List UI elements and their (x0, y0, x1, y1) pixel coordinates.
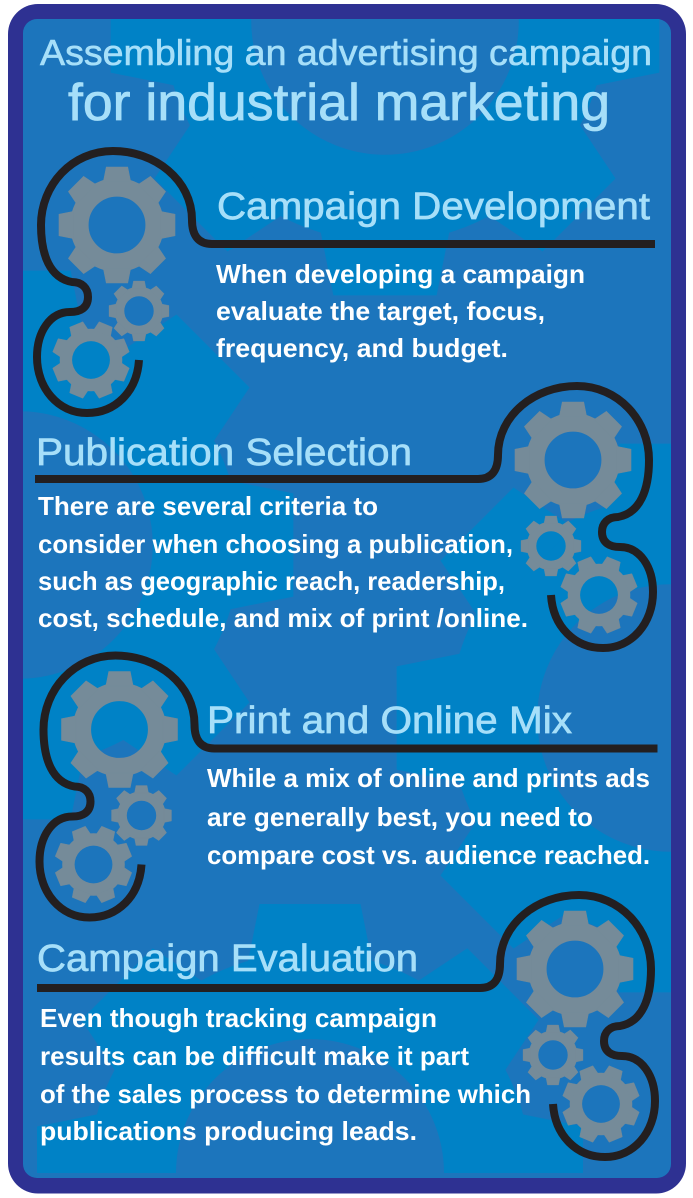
icon: gears in loop (37, 895, 655, 1157)
section: campaign evaluation (37, 895, 655, 1157)
text: campaign evaluation: Even though tracking campaign (40, 1003, 437, 1033)
text: print and online mix: are generally best, you need to (207, 802, 593, 832)
icon: gears in loop (37, 151, 655, 413)
text: campaign development: evaluate the target, focus, (216, 296, 545, 326)
heading: print and online mix: Print and Online Mix (207, 700, 572, 742)
heading: campaign development: Campaign Development (217, 186, 650, 228)
title: for industrial marketing (68, 74, 610, 132)
text: publication selection: There are several criteria to (38, 491, 378, 521)
heading: campaign evaluation: Campaign Evaluation (37, 938, 418, 980)
text: campaign development: frequency, and budget. (216, 333, 508, 363)
section: publication selection (35, 386, 653, 648)
text: print and online mix (207, 763, 650, 870)
text: campaign development: When developing a campaign (216, 259, 585, 289)
text: publication selection: consider when choosing a publication, (38, 529, 513, 559)
text: campaign evaluation (40, 1003, 531, 1146)
icon: gears in loop (35, 386, 653, 648)
title: Assembling an advertising campaign (40, 32, 652, 73)
text: publication selection (38, 491, 528, 633)
text: campaign evaluation: of the sales process to determine which (40, 1079, 531, 1109)
text: campaign evaluation: publications producing leads. (40, 1116, 417, 1146)
text: campaign development (216, 259, 585, 363)
text: publication selection: such as geographic reach, readership, (38, 566, 505, 596)
text: campaign evaluation: results can be difficult make it part (40, 1041, 469, 1071)
text: print and online mix: compare cost vs. audience reached. (207, 840, 650, 870)
heading: publication selection: Publication Selection (36, 432, 412, 474)
text: print and online mix: While a mix of online and prints ads (207, 763, 650, 793)
section: print and online mix (40, 656, 658, 918)
title (40, 32, 652, 132)
section: campaign development (37, 151, 655, 413)
icon: gears in loop (40, 656, 658, 918)
text: publication selection: cost, schedule, and mix of print /online. (38, 603, 528, 633)
